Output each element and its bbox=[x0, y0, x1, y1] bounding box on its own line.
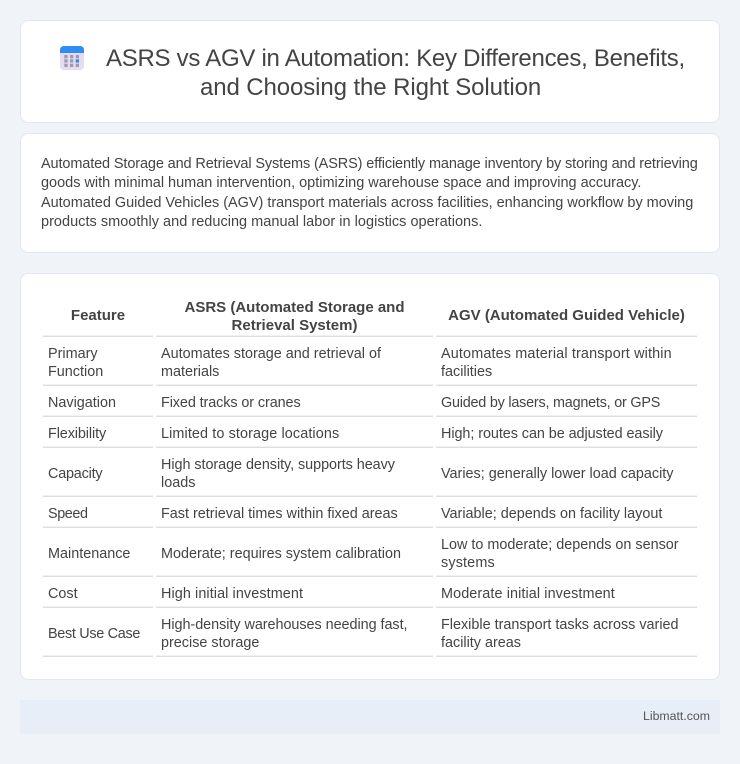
row: best use case bbox=[48, 617, 679, 651]
row: best use case: Flexible transport tasks across varied bbox=[441, 617, 679, 633]
table header bbox=[71, 299, 685, 334]
intro paragraph: products smoothly and reducing manual labor in logistics operations. bbox=[41, 214, 482, 230]
row: maintenance bbox=[48, 537, 679, 571]
row: capacity bbox=[48, 457, 674, 491]
icon: calendar grid bbox=[60, 46, 84, 70]
row: maintenance: systems bbox=[441, 555, 495, 571]
row: maintenance: Moderate; requires system calibration bbox=[161, 546, 401, 562]
row: best use case: facility areas bbox=[441, 635, 521, 651]
row: primary function bbox=[48, 346, 672, 380]
panel: comparison table card bbox=[20, 273, 720, 680]
row: navigation: Navigation bbox=[48, 395, 116, 411]
row: cost: Moderate initial investment bbox=[441, 586, 615, 602]
row: capacity: Varies; generally lower load capacity bbox=[441, 466, 674, 482]
row: primary function: Primary bbox=[48, 346, 98, 362]
row: primary function: Function bbox=[48, 364, 103, 380]
row: best use case: precise storage bbox=[161, 635, 259, 651]
row: navigation: Guided by lasers, magnets, or GPS bbox=[441, 395, 660, 411]
intro paragraph: goods with minimal human intervention, optimizing warehouse space and improving accuracy. bbox=[41, 175, 641, 191]
table header: AGV (Automated Guided Vehicle) bbox=[448, 307, 685, 324]
row: cost bbox=[48, 586, 615, 602]
panel: title card bbox=[20, 20, 720, 123]
intro paragraph bbox=[41, 156, 698, 230]
row: best use case: Best Use Case bbox=[48, 626, 140, 642]
intro paragraph: Automated Guided Vehicles (AGV) transport materials across facilities, enhancing workflow by moving bbox=[41, 195, 693, 211]
row: flexibility: Flexibility bbox=[48, 426, 106, 442]
row: cost: Cost bbox=[48, 586, 78, 602]
row: cost: High initial investment bbox=[161, 586, 303, 602]
row: primary function: materials bbox=[161, 364, 219, 380]
title: ASRS vs AGV in Automation: Key Differences, Benefits, bbox=[106, 45, 685, 72]
row: primary function: Automates material transport within bbox=[441, 346, 672, 362]
row: primary function: Automates storage and retrieval of bbox=[161, 346, 381, 362]
row: capacity: High storage density, supports heavy bbox=[161, 457, 395, 473]
row: speed: Speed bbox=[48, 506, 88, 522]
row: speed: Variable; depends on facility layout bbox=[441, 506, 662, 522]
table header: Feature bbox=[71, 307, 125, 324]
table header: Retrieval System) bbox=[232, 317, 357, 334]
panel: intro text card bbox=[20, 133, 720, 253]
row: primary function: facilities bbox=[441, 364, 492, 380]
row: speed: Fast retrieval times within fixed areas bbox=[161, 506, 398, 522]
row: navigation bbox=[48, 395, 660, 411]
footer bar bbox=[20, 700, 720, 734]
title bbox=[106, 45, 685, 101]
row: navigation: Fixed tracks or cranes bbox=[161, 395, 301, 411]
row: maintenance: Maintenance bbox=[48, 546, 130, 562]
footer credit: Libmatt.com bbox=[643, 709, 710, 723]
row: maintenance: Low to moderate; depends on sensor bbox=[441, 537, 679, 553]
table header: ASRS (Automated Storage and bbox=[184, 299, 405, 316]
title: and Choosing the Right Solution bbox=[200, 74, 541, 101]
row: flexibility: High; routes can be adjusted easily bbox=[441, 426, 663, 442]
row: flexibility: Limited to storage locations bbox=[161, 426, 339, 442]
intro paragraph: Automated Storage and Retrieval Systems (ASRS) efficiently manage inventory by storing and retrieving bbox=[41, 156, 698, 172]
row: capacity: Capacity bbox=[48, 466, 102, 482]
row: flexibility bbox=[48, 426, 663, 442]
row: capacity: loads bbox=[161, 475, 195, 491]
row: best use case: High-density warehouses needing fast, bbox=[161, 617, 408, 633]
row: speed bbox=[48, 506, 662, 522]
